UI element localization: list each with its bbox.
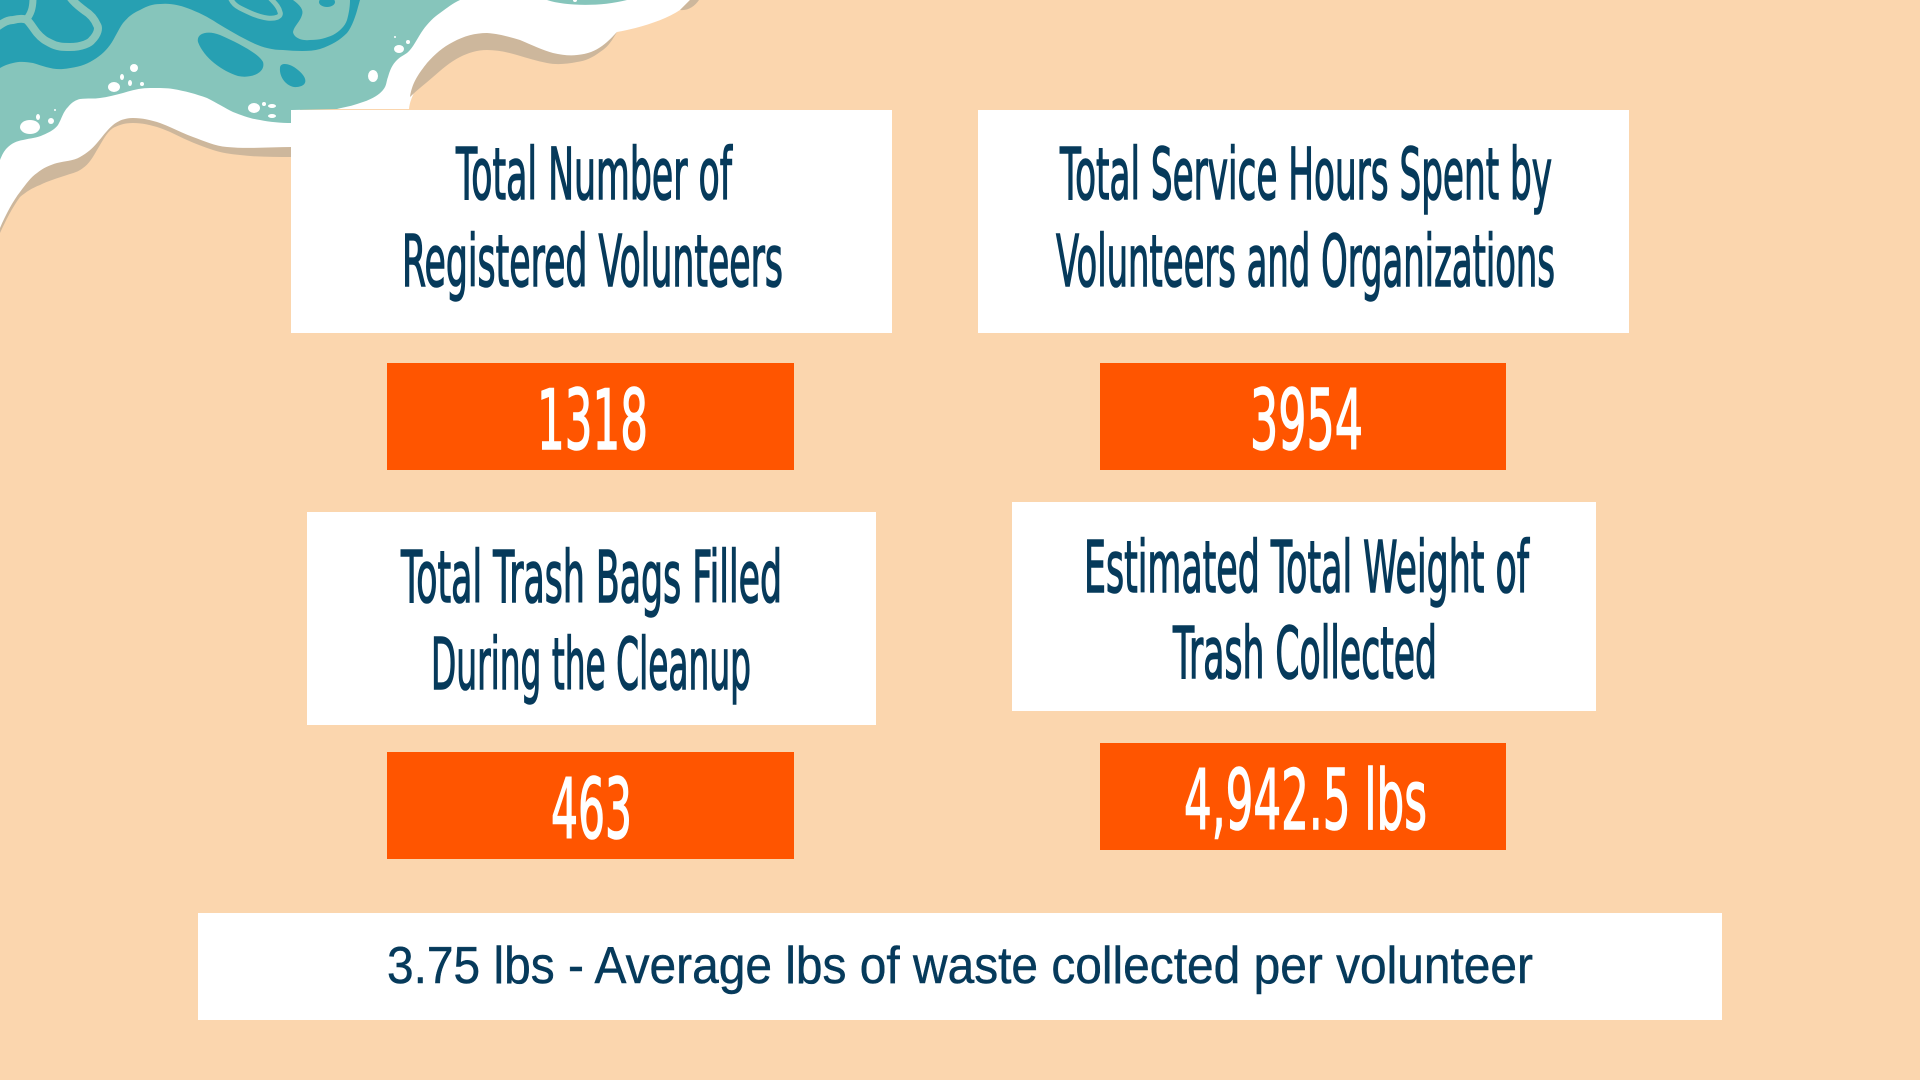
teal patch top bbox=[547, 0, 627, 5]
illustration: ocean wave and foam bbox=[0, 0, 699, 233]
panel: average waste per volunteer: 3.75 lbs - Average lbs of waste collected per volunteer bbox=[387, 937, 1533, 995]
stat: 463: 463 bbox=[551, 761, 632, 858]
panel: registered volunteers: Registered Volunteers bbox=[402, 220, 783, 303]
panel: service hours bbox=[978, 110, 1629, 333]
light patch top right bbox=[293, 0, 350, 40]
light swirl branch bbox=[26, 0, 33, 20]
panel: trash bags bbox=[307, 512, 876, 725]
panel: total weight bbox=[1012, 502, 1596, 711]
light swirl left bbox=[0, 0, 98, 47]
panel: trash bags: Total Trash Bags Filled bbox=[401, 536, 782, 619]
panel: registered volunteers bbox=[291, 110, 892, 333]
dark blob small bbox=[280, 64, 305, 87]
sand shadow lower bbox=[0, 118, 292, 233]
dark spot top right bbox=[319, 0, 335, 7]
heading: registered volunteers: Total Number of bbox=[456, 133, 733, 216]
dark teal water main bbox=[0, 0, 360, 69]
stat: 1318 bbox=[387, 363, 794, 470]
stat: 3954 bbox=[1100, 363, 1506, 470]
sand shadow upper bbox=[410, 32, 617, 97]
foam band bbox=[0, 0, 690, 230]
heading: trash bags: During the Cleanup bbox=[431, 623, 751, 706]
light teal water bbox=[0, 0, 460, 160]
dark blob large bbox=[198, 33, 263, 77]
light swirl top bbox=[230, 0, 280, 18]
stat: 4,942.5 lbs: 4,942.5 lbs bbox=[1184, 752, 1427, 849]
stat: 1318: 1318 bbox=[537, 372, 648, 469]
stat: 3954: 3954 bbox=[1250, 372, 1363, 469]
stat: 4,942.5 lbs bbox=[1100, 743, 1506, 850]
heading: total weight: Trash Collected bbox=[1173, 612, 1437, 695]
sand shadow top right bbox=[680, 0, 699, 10]
panel: average waste per volunteer bbox=[198, 913, 1722, 1020]
stat: 463 bbox=[387, 752, 794, 859]
foam bubbles bbox=[20, 0, 577, 134]
